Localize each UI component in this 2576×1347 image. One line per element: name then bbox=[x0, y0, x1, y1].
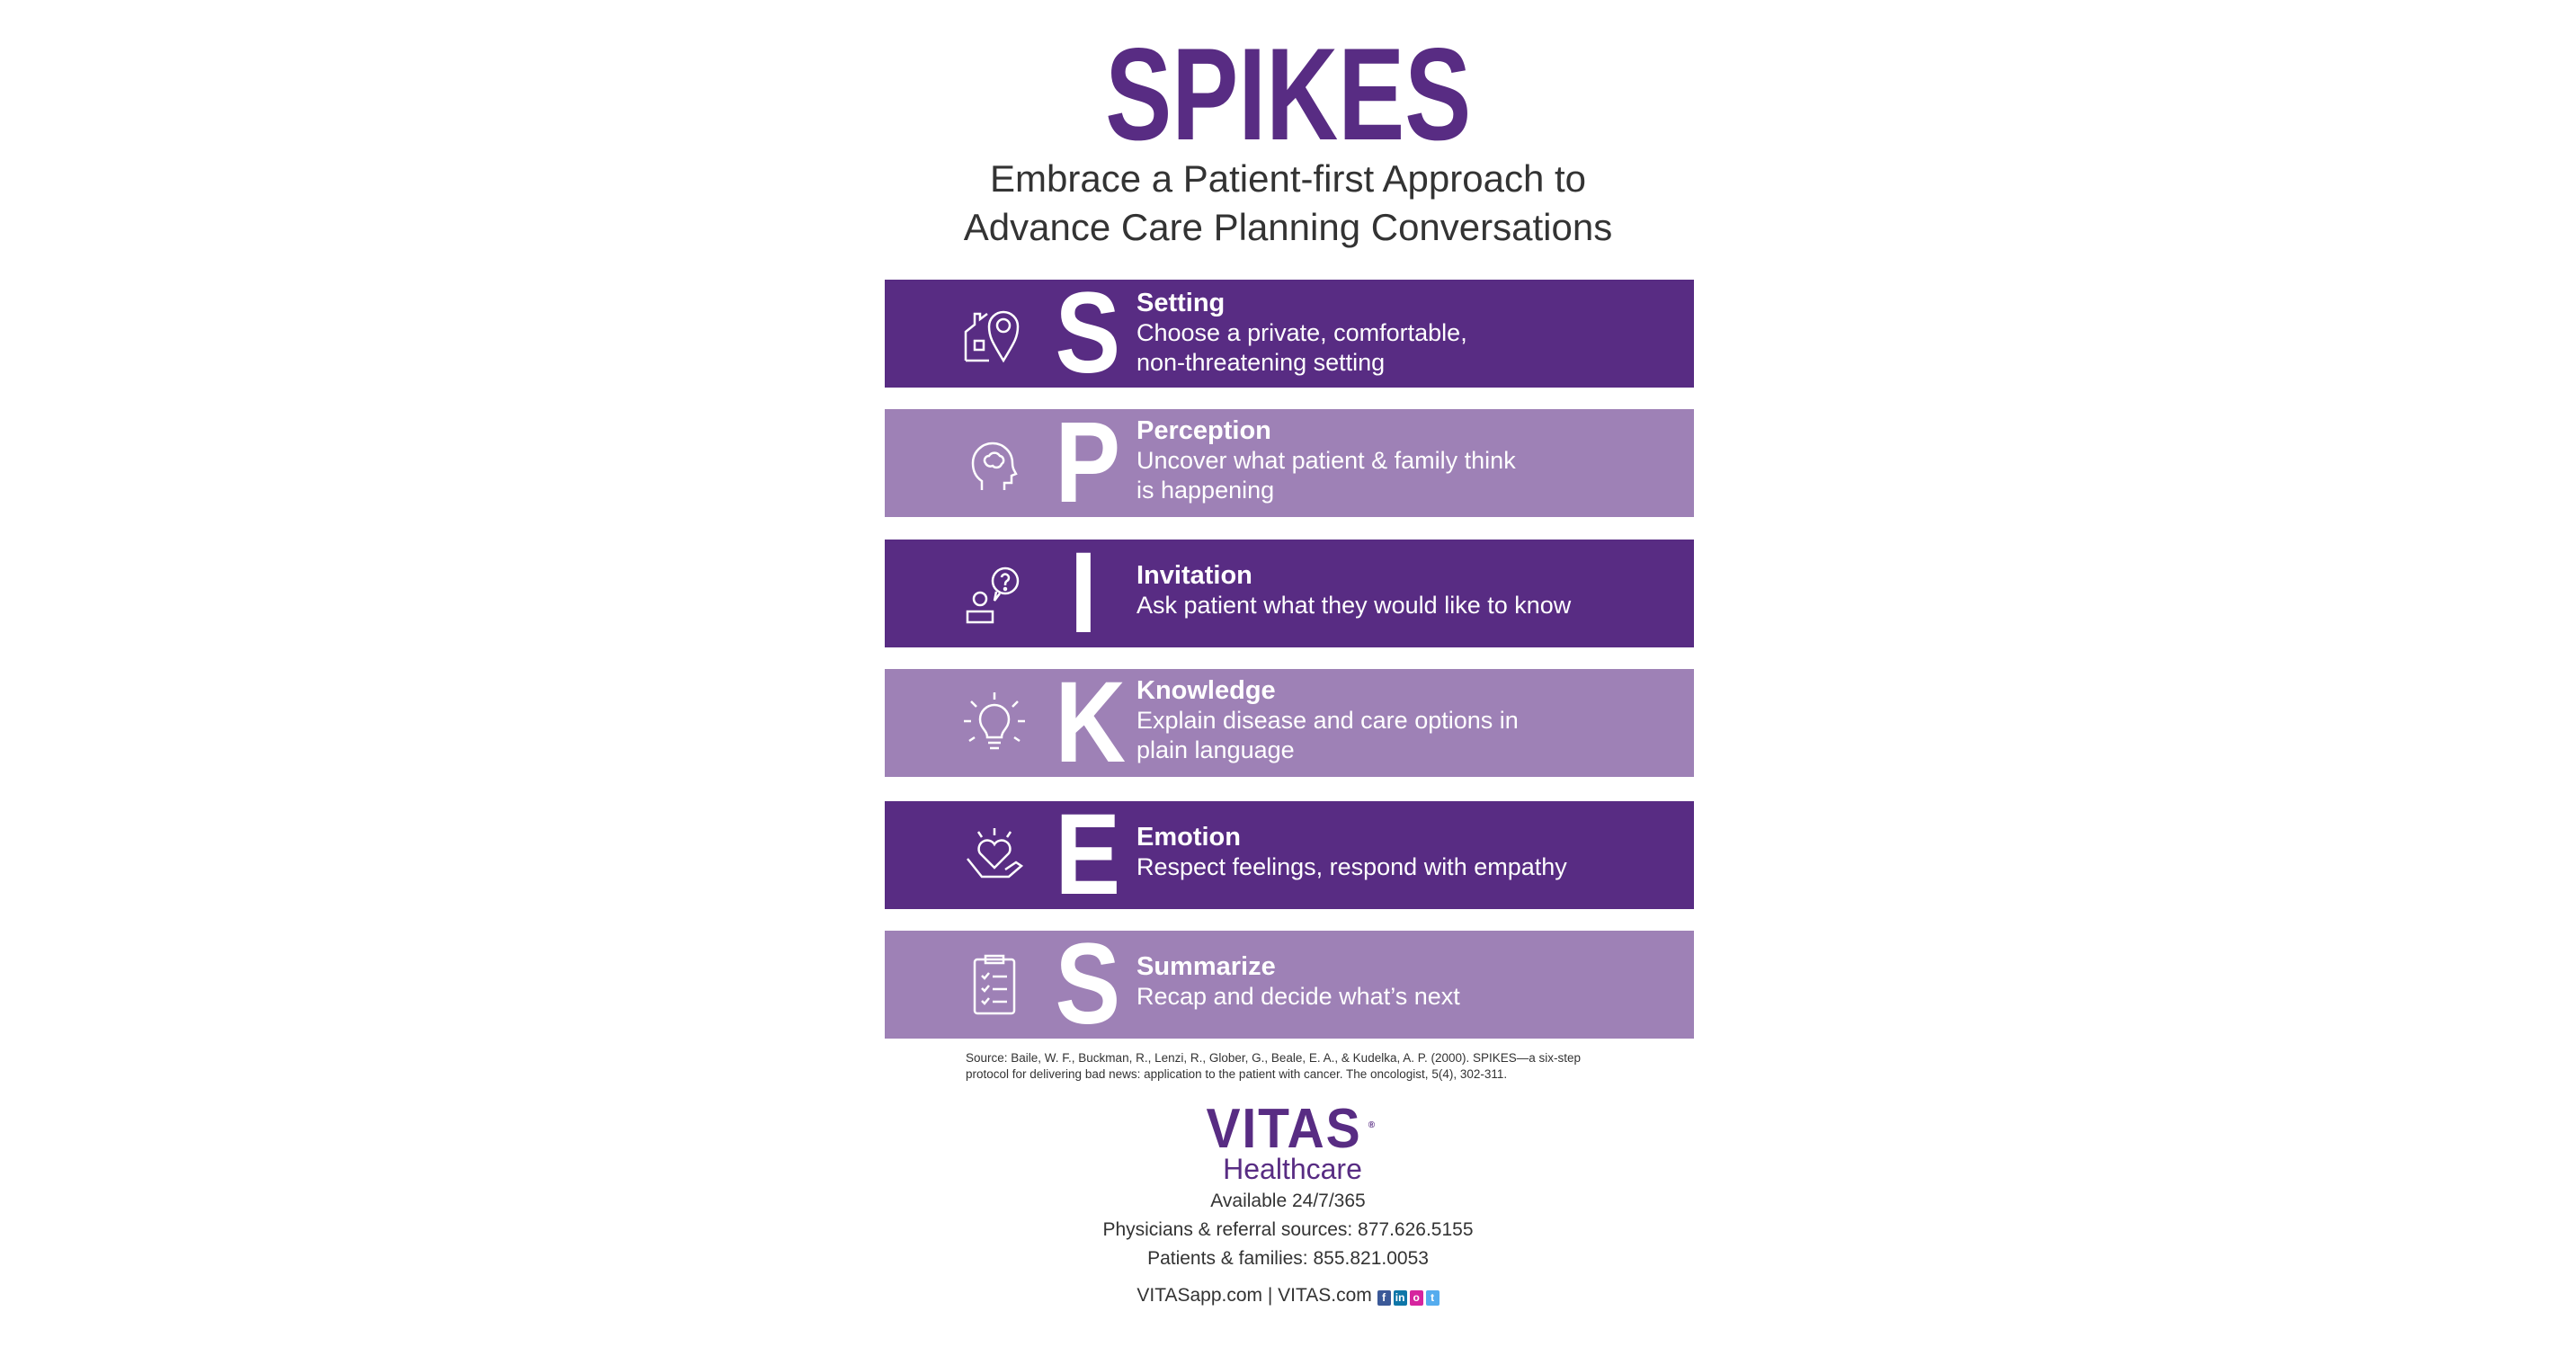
text: Summarize bbox=[1136, 952, 1276, 981]
text bbox=[1136, 289, 1467, 376]
icon: question person bbox=[966, 566, 1020, 624]
panel: emotion bbox=[885, 801, 1694, 909]
logo: VITAS Healthcare: Healthcare bbox=[1223, 1153, 1362, 1185]
letter: P bbox=[1056, 398, 1120, 527]
letter: I bbox=[1070, 529, 1097, 657]
websites and social icons: o bbox=[1413, 1291, 1420, 1304]
icon: lightbulb bbox=[964, 692, 1025, 750]
panel: knowledge bbox=[885, 669, 1694, 777]
subtitle: Advance Care Planning Conversations bbox=[964, 206, 1612, 248]
text: Knowledge bbox=[1136, 676, 1276, 705]
letter: S bbox=[1056, 269, 1120, 397]
source bbox=[966, 1051, 1581, 1081]
text bbox=[1136, 952, 1460, 1010]
text: Explain disease and care options in bbox=[1136, 707, 1519, 734]
panel: invitation bbox=[885, 540, 1694, 647]
text: Setting bbox=[1136, 289, 1225, 317]
text: is happening bbox=[1136, 477, 1274, 504]
text bbox=[1136, 823, 1567, 880]
panel: summarize bbox=[885, 931, 1694, 1039]
contact info: Patients & families: 855.821.0053 bbox=[1147, 1248, 1429, 1269]
subtitle bbox=[964, 157, 1612, 248]
panel: perception bbox=[885, 409, 1694, 517]
websites and social icons: in bbox=[1395, 1291, 1404, 1304]
text: Uncover what patient & family think bbox=[1136, 447, 1516, 474]
text: Perception bbox=[1136, 416, 1271, 445]
contact info: Physicians & referral sources: 877.626.5155 bbox=[1102, 1219, 1474, 1240]
contact info bbox=[1102, 1191, 1474, 1269]
icon: house pin bbox=[964, 311, 1020, 363]
letter: S bbox=[1056, 920, 1120, 1048]
letter: E bbox=[1056, 790, 1120, 919]
text: Recap and decide what’s next bbox=[1136, 983, 1460, 1010]
title: SPIKES bbox=[1105, 21, 1471, 167]
icon: clipboard bbox=[973, 955, 1016, 1014]
logo: VITAS Healthcare: ® bbox=[1368, 1120, 1377, 1130]
icon: head bbox=[971, 442, 1018, 490]
subtitle: Embrace a Patient-first Approach to bbox=[990, 157, 1586, 200]
icon: heart hand bbox=[967, 828, 1023, 878]
logo: VITAS Healthcare: VITAS bbox=[1206, 1098, 1361, 1160]
source: Source: Baile, W. F., Buckman, R., Lenzi, R., Glober, G., Beale, E. A., & Kudelka, A. P. (2000). SPIKES—a six-step bbox=[966, 1051, 1581, 1065]
text: plain language bbox=[1136, 736, 1295, 763]
logo: VITAS Healthcare bbox=[1206, 1098, 1377, 1185]
panel: setting bbox=[885, 280, 1694, 388]
text: Respect feelings, respond with empathy bbox=[1136, 853, 1567, 880]
websites and social icons: f bbox=[1382, 1291, 1386, 1304]
websites and social icons: VITASapp.com | VITAS.com bbox=[1136, 1285, 1372, 1306]
text: Ask patient what they would like to know bbox=[1136, 592, 1571, 619]
text bbox=[1136, 676, 1519, 763]
text: non-threatening setting bbox=[1136, 349, 1385, 376]
text: Emotion bbox=[1136, 823, 1241, 852]
websites and social icons: t bbox=[1431, 1291, 1434, 1304]
text bbox=[1136, 416, 1516, 504]
contact info: Available 24/7/365 bbox=[1210, 1191, 1366, 1211]
text bbox=[1136, 561, 1572, 619]
text: Invitation bbox=[1136, 561, 1252, 590]
text: Choose a private, comfortable, bbox=[1136, 319, 1467, 346]
source: protocol for delivering bad news: application to the patient with cancer. The oncologist, 5(4), 302-311. bbox=[966, 1067, 1507, 1081]
letter: K bbox=[1056, 658, 1126, 787]
